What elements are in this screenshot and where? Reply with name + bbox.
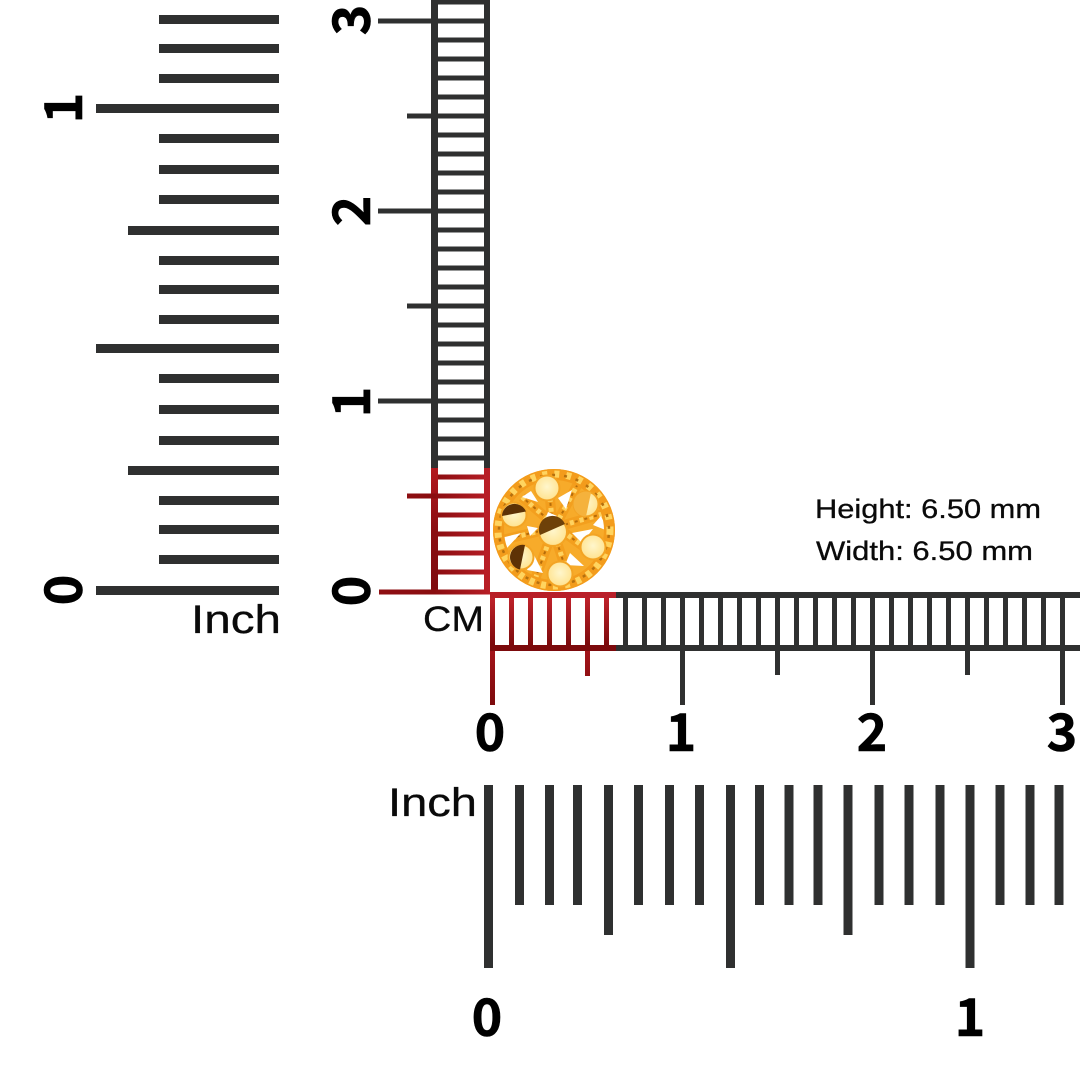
red section of vertical ruler [379,468,490,593]
vertical ruler number 3: 3 [310,5,385,35]
vertical ruler number 1: 1 [310,387,385,417]
rope rim [498,474,610,586]
horizontal ruler number 3: 3 [1047,691,1077,766]
vertical ruler number 0: 0 [310,576,385,606]
dimensions: width: Width: 6.50 mm [816,536,1033,566]
left ruler number 1: 1 [22,93,97,123]
horizontal ruler number 1: 1 [666,691,696,766]
horizontal centimetre ruler [490,592,1080,705]
braided bands [504,484,602,578]
bottom ruler number 1: 1 [955,976,985,1051]
horizontal ruler number 0: 0 [475,691,505,766]
dimensions: height: Height: 6.50 mm [815,494,1041,524]
disc facets [573,492,591,516]
bottom inch ruler [488,785,1059,968]
vertical centimetre ruler [378,0,490,593]
left inch ruler [96,20,279,590]
left ruler number 0: 0 [22,575,97,605]
discs [502,476,606,586]
bottom ruler number 0: 0 [472,976,502,1051]
left ruler label: Inch: Inch [191,598,281,642]
bottom ruler label: Inch: Inch [388,781,477,825]
icon: gold filigree earring stud [493,469,615,591]
horizontal ruler number 2: 2 [857,691,887,766]
vertical ruler number 2: 2 [310,196,385,226]
label: CM: CM [423,600,484,639]
red section of horizontal ruler [490,592,616,705]
openwork gaps [501,490,608,573]
